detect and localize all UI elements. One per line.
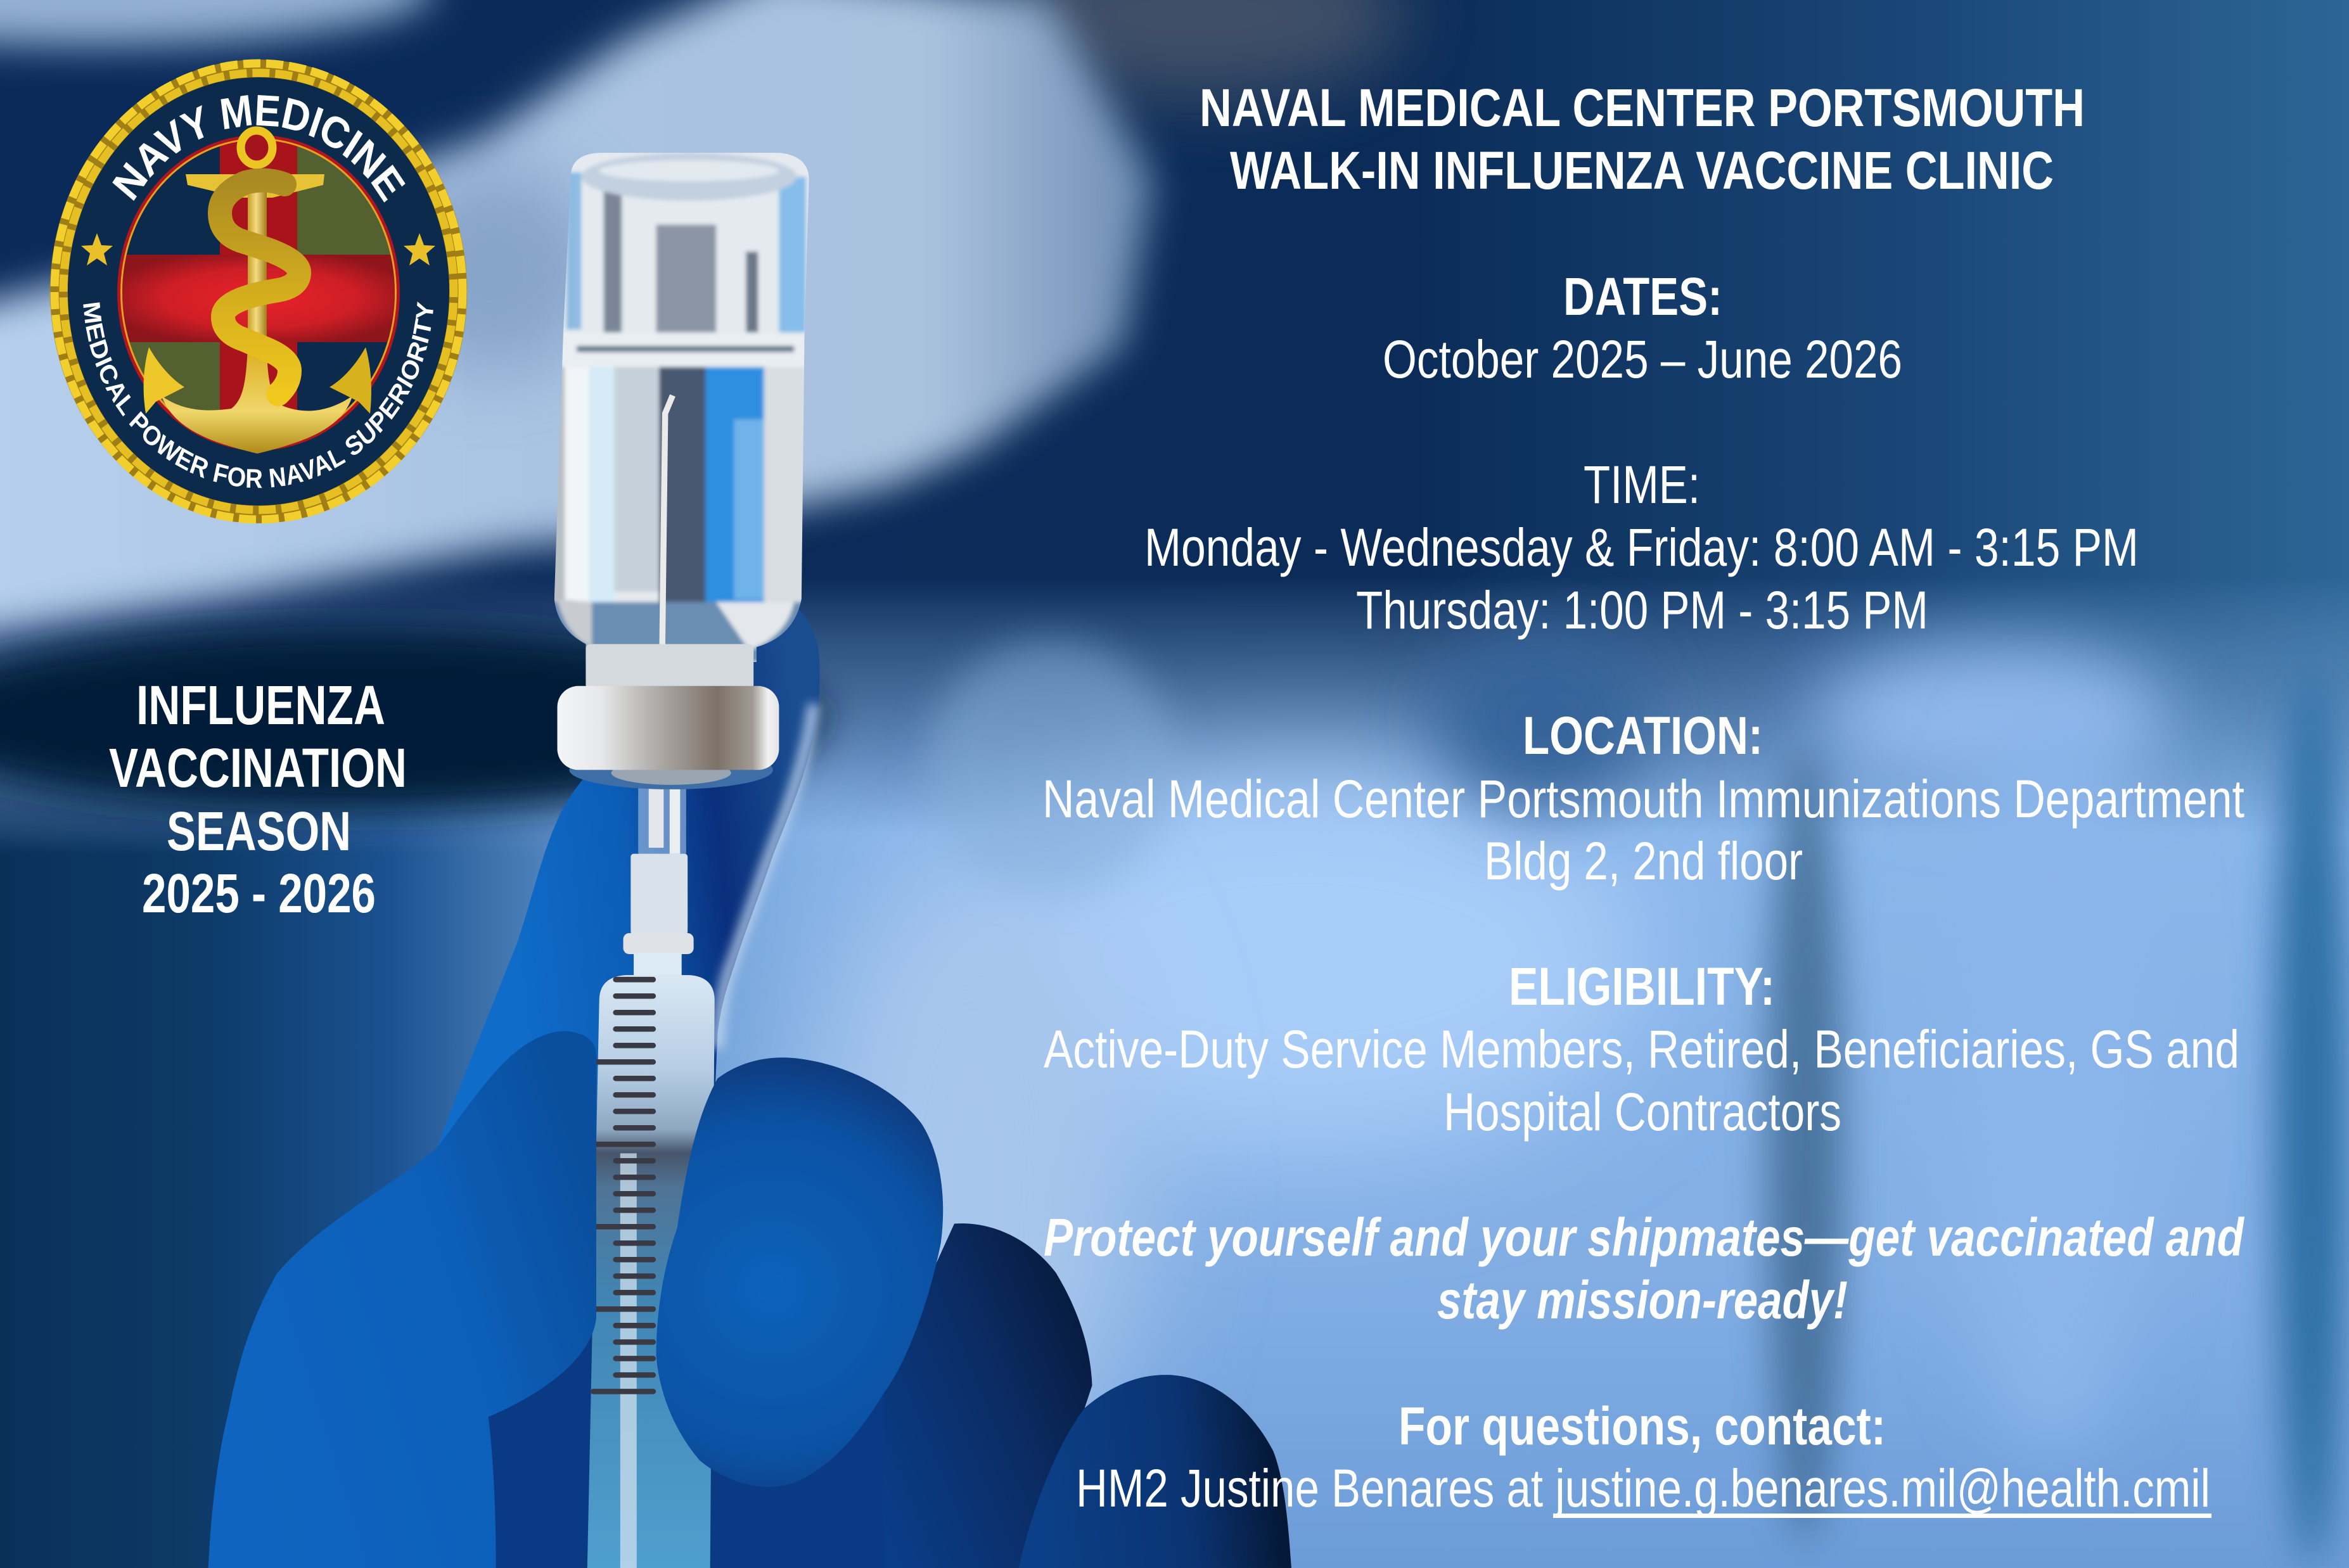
left title: influenza vaccination season: SEASON [167,801,351,862]
back finger behind syringe [437,607,820,1198]
location: Bldg 2, 2nd floor [1484,831,1803,891]
logo: Navy Medicine seal [50,60,467,523]
thumb and palm [208,1031,596,1568]
crimp disc [611,761,731,785]
location: LOCATION: [1523,706,1763,765]
dates [1383,267,1902,389]
rope border [54,63,463,519]
left title: influenza vaccination season: INFLUENZA [136,675,385,736]
dates: DATES: [1563,267,1722,326]
contact: For questions, contact: [1399,1396,1886,1456]
time: TIME: [1584,455,1700,514]
needle hub [624,773,694,976]
quartered field with red cross [114,127,406,457]
eligibility: ELIGIBILITY: [1509,957,1775,1016]
pinky finger [1019,1375,1291,1568]
left title: influenza vaccination season: VACCINATION [109,737,407,799]
time: Thursday: 1:00 PM - 3:15 PM [1356,580,1928,640]
time [1144,455,2139,640]
time: Monday - Wednesday & Friday: 8:00 AM - 3:15 PM [1144,518,2139,577]
ring finger [884,1223,1092,1568]
syringe barrel [587,975,715,1568]
syringe [587,773,715,1568]
seal text: NAVY MEDICINE [112,95,406,203]
stars [81,233,435,265]
plunger rod [620,1153,637,1568]
barrel tick marks [593,979,653,1391]
cap underside [569,750,773,789]
clinic heading: NAVAL MEDICAL CENTER PORTSMOUTH [1200,78,2085,137]
lower hand shadow [480,1138,1034,1568]
serpent [220,181,299,394]
vial [547,147,816,789]
eligibility: Hospital Contractors [1443,1082,1841,1142]
left title: influenza vaccination season [109,675,407,924]
hand in blue glove with syringe and vial [208,147,1291,1568]
needle inside vial [662,395,673,656]
vial collar [586,644,753,689]
call to action: stay mission-ready! [1437,1270,1848,1330]
contact [1076,1396,2211,1518]
vial glass [547,147,816,671]
dates: October 2025 – June 2026 [1383,329,1902,389]
location [1042,706,2244,891]
seal text [78,85,439,494]
left title: influenza vaccination season: 2025 - 2026 [142,863,376,924]
eligibility [1044,957,2239,1142]
call to action [1044,1208,2244,1330]
middle finger [656,1057,943,1487]
clinic heading: WALK-IN INFLUENZA VACCINE CLINIC [1230,141,2054,200]
vial metal cap [557,686,779,770]
gold anchor [144,131,371,454]
clinic heading [1200,78,2085,200]
seal text: MEDICAL POWER FOR NAVAL SUPERIORITY [83,302,433,488]
inner red and gold ring [117,135,400,450]
